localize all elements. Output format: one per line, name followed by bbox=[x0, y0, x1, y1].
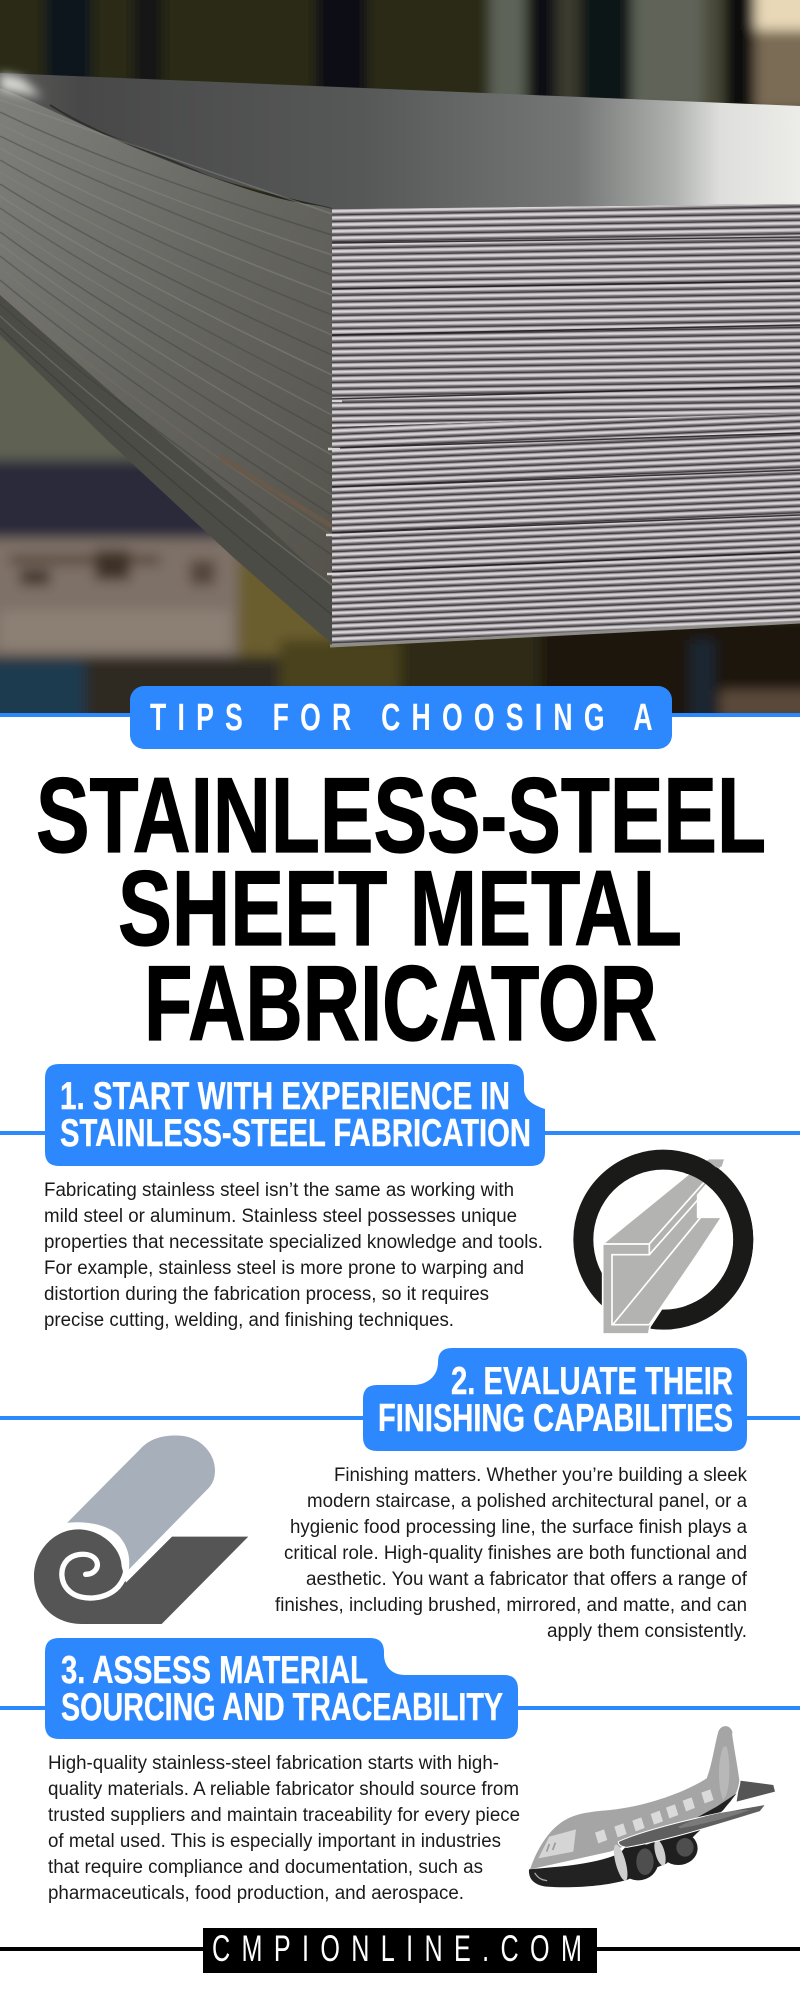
section 3 body text: that require compliance and documentation, such as bbox=[48, 1857, 483, 1878]
section 2 body text: Finishing matters. Whether you’re building a sleek bbox=[334, 1465, 747, 1486]
section 2 bbox=[0, 1348, 800, 1642]
section 1 body text: Fabricating stainless steel isn’t the same as working with bbox=[44, 1180, 514, 1201]
section 3 heading: SOURCING AND TRACEABILITY bbox=[61, 1686, 503, 1729]
section 3 bbox=[0, 1638, 800, 1904]
section 3 body text: trusted suppliers and maintain traceability for every piece bbox=[48, 1805, 520, 1826]
section 1 body text bbox=[44, 1180, 543, 1331]
section 2 body text: aesthetic. You want a fabricator that offers a range of bbox=[306, 1569, 748, 1590]
section 1 body text: properties that necessitate specialized knowledge and tools. bbox=[44, 1232, 543, 1253]
section 1 heading: 1. START WITH EXPERIENCE IN bbox=[60, 1075, 510, 1118]
section 2 body text: apply them consistently. bbox=[547, 1621, 747, 1642]
photo: top sheet surface bbox=[0, 73, 800, 209]
photo: side of stack with fanned sheet edges bbox=[0, 88, 340, 645]
icon: airplane bbox=[529, 1726, 775, 1887]
section 3 body text: pharmaceuticals, food production, and aerospace. bbox=[48, 1883, 464, 1904]
section 2 heading bbox=[363, 1348, 747, 1451]
footer line bbox=[0, 1947, 800, 1951]
section 1 body text: distortion during the fabrication process, so it requires bbox=[44, 1284, 489, 1305]
section 3 body text: of metal used. This is especially important in industries bbox=[48, 1831, 501, 1852]
section 2 body text: modern staircase, a polished architectural panel, or a bbox=[307, 1491, 747, 1512]
main title bbox=[36, 755, 766, 1063]
section 1 body text: For example, stainless steel is more prone to warping and bbox=[44, 1258, 524, 1279]
section 2 body text: hygienic food processing line, the surface finish plays a bbox=[290, 1517, 747, 1538]
section 1 body text: mild steel or aluminum. Stainless steel possesses unique bbox=[44, 1206, 517, 1227]
section 2 body text: finishes, including brushed, mirrored, and matte, and can bbox=[275, 1595, 747, 1616]
icon: rolled steel sheet bbox=[34, 1436, 248, 1624]
section 3 heading: 3. ASSESS MATERIAL bbox=[61, 1649, 368, 1692]
section 3 heading bbox=[45, 1638, 518, 1739]
section 3 body text: quality materials. A reliable fabricator should source from bbox=[48, 1779, 519, 1800]
section 2 body text bbox=[275, 1465, 748, 1642]
section 3 body text: High-quality stainless-steel fabrication starts with high- bbox=[48, 1753, 499, 1774]
hero photo: stack of steel sheets bbox=[0, 0, 800, 760]
section 2 body text: critical role. High-quality finishes are both functional and bbox=[284, 1543, 747, 1564]
section 1 heading: STAINLESS-STEEL FABRICATION bbox=[60, 1112, 531, 1155]
section 1 body text: precise cutting, welding, and finishing techniques. bbox=[44, 1310, 454, 1331]
section 3 body text bbox=[48, 1753, 520, 1904]
section 1 heading bbox=[45, 1064, 545, 1166]
photo blurred background bbox=[0, 0, 800, 760]
eyebrow pill: TIPS FOR CHOOSING A bbox=[150, 695, 653, 738]
photo: front face of sheet stack bbox=[332, 204, 800, 427]
eyebrow pill bbox=[130, 686, 672, 749]
section 1 bbox=[0, 1064, 800, 1334]
header blue line bbox=[0, 713, 800, 717]
icon: steel channel beam in ring bbox=[583, 1159, 743, 1334]
footer website badge: CMPIONLINE.COM bbox=[212, 1927, 582, 1969]
